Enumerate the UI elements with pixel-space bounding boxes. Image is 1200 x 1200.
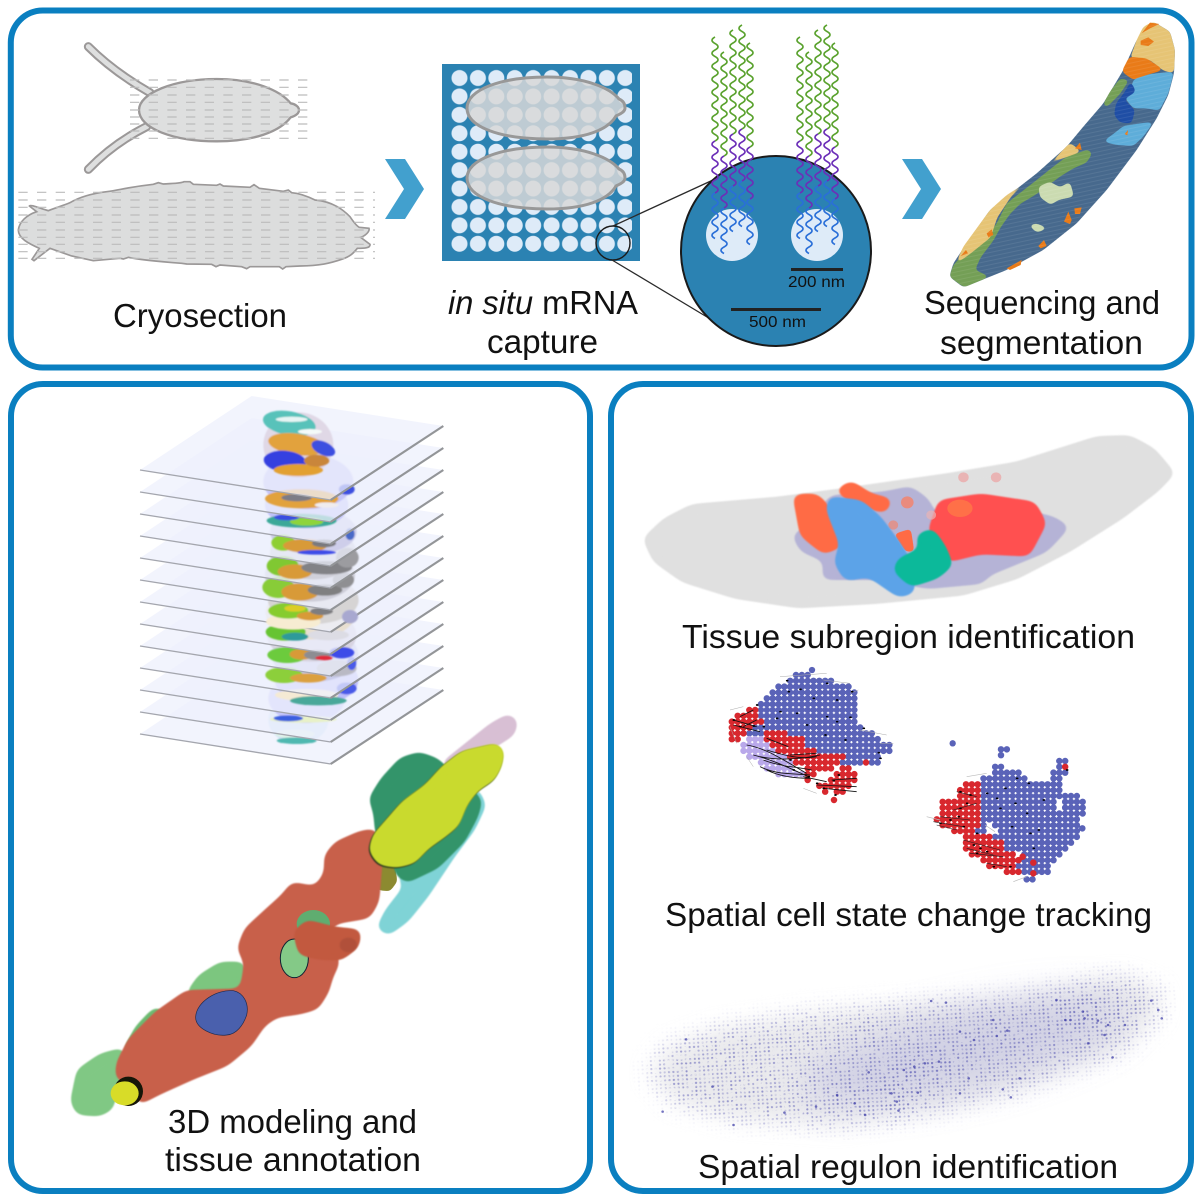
organ: pink bbox=[440, 713, 518, 773]
heading: in situ mRNA capture: capture bbox=[487, 323, 598, 360]
scale bar: 200 nm bbox=[791, 268, 843, 271]
plate and slice 5 bbox=[140, 484, 443, 588]
scale bar: 500 nm bbox=[731, 308, 821, 311]
magnified circle bbox=[681, 156, 871, 346]
organ: tail yellow ball bbox=[111, 1077, 143, 1106]
segment: orange flecks bbox=[961, 23, 1159, 270]
organ: cyan bbox=[376, 785, 487, 936]
chart: stacked tissue sections bbox=[140, 396, 443, 764]
panel: spatial analyses bbox=[611, 384, 1191, 1191]
cluster 2: stray cell bbox=[949, 740, 956, 746]
larva body bbox=[642, 435, 1176, 608]
segment: orange band bbox=[1122, 57, 1164, 80]
region: pale spots bbox=[926, 472, 1001, 520]
chart: magnified capture spots with oligo probes bbox=[681, 25, 871, 346]
organ: light green tail bbox=[70, 1047, 132, 1117]
heading: Cryosection: Cryosection bbox=[113, 297, 287, 334]
region: orange on red bbox=[947, 500, 973, 517]
organ: light green lower bbox=[120, 1007, 167, 1055]
heading: in situ mRNA capture: in situ mRNA bbox=[448, 284, 638, 321]
plate and slice 3 bbox=[140, 440, 443, 544]
segment: pale green patch bbox=[1038, 182, 1074, 205]
plate and slice 1 bbox=[140, 396, 443, 500]
organ: gut bbox=[115, 828, 383, 1105]
organ: upper green tube bbox=[297, 910, 330, 938]
magnifier ring bbox=[596, 226, 630, 260]
plate and slice 8 bbox=[140, 550, 443, 654]
capture wells bbox=[450, 68, 632, 254]
region: orange left bbox=[792, 493, 844, 555]
icon: larva cryosection bbox=[18, 182, 375, 269]
plate and slice 11 bbox=[140, 616, 443, 720]
arrow: chevron 2 bbox=[902, 159, 941, 219]
tissue section 1 bbox=[467, 77, 625, 139]
chart: tissue subregion map bbox=[642, 435, 1176, 608]
chart: segmented larva section bbox=[949, 22, 1175, 287]
panel frame: bottom left bbox=[11, 384, 590, 1191]
plate and slice 2 bbox=[140, 418, 443, 522]
organ: blue spot bbox=[196, 991, 247, 1035]
organ: gut loop shadow bbox=[340, 938, 357, 952]
heading: Sequencing and segmentation: segmentation bbox=[940, 324, 1143, 361]
region: blue bbox=[826, 496, 915, 598]
hot zone haze bbox=[794, 977, 1133, 1123]
scale label: 200 nm: 200 nm bbox=[788, 274, 845, 291]
region: teal bbox=[893, 527, 954, 587]
region: red bbox=[928, 493, 1047, 563]
plate and slice 7 bbox=[140, 528, 443, 632]
plate and slice 13 bbox=[140, 660, 443, 764]
heading: Spatial regulon identification: Spatial regulon identification bbox=[698, 1148, 1118, 1185]
organ: inner green lobe bbox=[280, 939, 308, 978]
heading: 3D modeling and tissue annotation bbox=[165, 1103, 421, 1178]
scale label: 500 nm: 500 nm bbox=[749, 314, 806, 331]
heading: Sequencing and segmentation bbox=[924, 284, 1160, 361]
region: lavender bbox=[791, 486, 1071, 589]
oligo strands left bbox=[712, 25, 753, 254]
cluster 1: red cells bbox=[732, 710, 866, 800]
capture well right bbox=[791, 209, 843, 261]
segment: tan head bbox=[1130, 22, 1175, 73]
organ: gut loop bbox=[293, 919, 362, 961]
segment: lower tan bbox=[955, 143, 1082, 265]
panel: sample preparation and capture workflow bbox=[11, 10, 1191, 368]
arrow: chevron 1 bbox=[385, 159, 424, 219]
segment: light blue lower bbox=[1103, 122, 1154, 146]
heading: Tissue subregion identification: Tissue subregion identification bbox=[682, 618, 1135, 655]
icon: adult fly cryosection bbox=[88, 47, 308, 169]
organ: olive bbox=[377, 865, 397, 891]
segment: lower green bbox=[949, 149, 1092, 287]
panel frame: bottom right bbox=[611, 384, 1191, 1191]
plate and slice 12 bbox=[140, 638, 443, 742]
cluster 2: red cells bbox=[937, 767, 1065, 873]
chart: regulon activity map bbox=[630, 960, 1178, 1140]
organ: yellow lobe bbox=[367, 743, 505, 869]
organ: light green rear bbox=[183, 962, 247, 997]
heading: Spatial cell state change tracking: Spatial cell state change tracking bbox=[665, 896, 1152, 933]
hot patches bbox=[824, 994, 1128, 1130]
panel frame: top bbox=[11, 10, 1191, 368]
plate and slice 9 bbox=[140, 572, 443, 676]
bright spots bbox=[663, 1000, 1162, 1125]
segment: upper green bbox=[1103, 78, 1129, 107]
plate and slice 10 bbox=[140, 594, 443, 698]
cluster 1: blue cells bbox=[749, 675, 890, 762]
heading: 3D modeling and tissue annotation: tissue annotation bbox=[165, 1141, 421, 1178]
capture slide bbox=[442, 64, 640, 261]
cluster 2: velocity streaks bbox=[927, 770, 1068, 882]
region: orange top bbox=[834, 480, 893, 514]
cluster 1: velocity streaks bbox=[730, 673, 893, 795]
chart: cell state change tracking bbox=[730, 667, 1083, 882]
speckled spots bbox=[630, 960, 1178, 1140]
larva haze bbox=[651, 977, 1160, 1125]
segment: dark blue bbox=[1114, 81, 1136, 123]
zoom connector lines bbox=[612, 180, 717, 323]
chart: 3D organ model bbox=[70, 713, 518, 1117]
heading: Sequencing and segmentation: Sequencing and bbox=[924, 284, 1160, 321]
capture well left bbox=[706, 209, 758, 261]
plate and slice 4 bbox=[140, 462, 443, 566]
plate and slice 6 bbox=[140, 506, 443, 610]
heading: 3D modeling and tissue annotation: 3D modeling and bbox=[168, 1103, 417, 1140]
section base bbox=[949, 22, 1175, 287]
section texture bbox=[949, 22, 1175, 287]
oligo strands right bbox=[797, 25, 838, 254]
heading: in situ mRNA capture bbox=[448, 284, 638, 360]
segment: light blue upper bbox=[1125, 72, 1174, 111]
cluster 2: blue cells bbox=[978, 749, 1083, 879]
segment: pale green flecks bbox=[1028, 223, 1048, 233]
panel: 3D modeling bbox=[11, 384, 590, 1191]
organ: dark green bbox=[368, 752, 483, 883]
region: orange spots bbox=[888, 496, 914, 552]
tissue section 2 bbox=[467, 147, 625, 209]
cluster 1: stray cell bbox=[809, 667, 815, 673]
cluster 1: lilac cells bbox=[743, 739, 802, 774]
chart: capture slide with tissue sections bbox=[442, 64, 640, 261]
